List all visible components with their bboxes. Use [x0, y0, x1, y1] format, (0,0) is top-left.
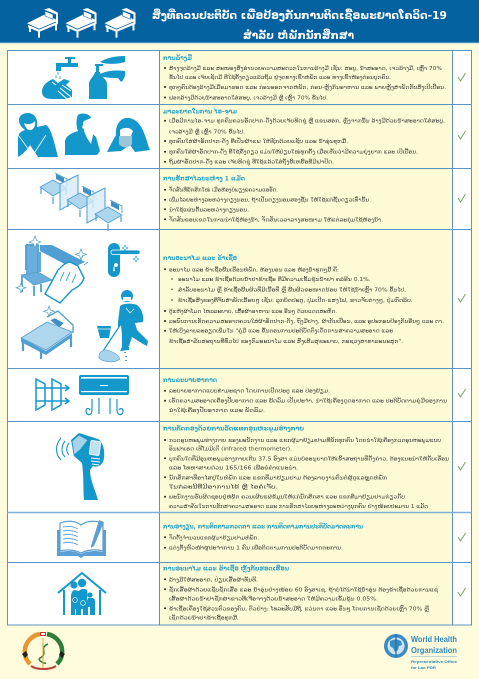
heading: ການຄັດກອງດ້ວຍການວັດແທກອຸນຫະພູມຮ່າງກາຍ	[163, 423, 304, 433]
text block: ລະບາຍອາກາດແບບທຳມະຊາດ ໂດຍການເປີດປະຕູ ແລະ ປ່ອງຢ້ຽມ.	[169, 387, 330, 395]
check mark	[458, 462, 466, 470]
logo: World Health Organization	[384, 634, 457, 670]
text block: ນຳໃຊ້ເຄື່ອງປັບອາກາດ ແລະ ພັດລົມ.	[169, 406, 265, 414]
text block: ກວດອຸນຫະພູມຮ່າງກາຍ ຂອງພະນັກງານ ແລະ ແຂກຜູ້ມາຢ້ຽມຢາມທີ່ພັກທຸກຄົນ ໂດຍນຳໃຊ້ເຄື່ອງກວດອຸນຫະພູມແບບ	[169, 437, 441, 444]
heading: ການອະນາໄມ ແລະ ຂ້າເຊື້ອ	[163, 253, 237, 262]
panel: one metre distancing	[40, 173, 466, 231]
text block: ຂຶ້ນໄປ ແລະ ເຈ້ຍເຊັດມື ທີ່ໃຊ້ຄັ້ງດຽວແລ້ວຖິ້ມ ຢູ່ຈຸດທາງເຂົ້າຫໍພັກ ແລະ ທາງເຂົ້າຫ້ອງຕ່ອນບຸກຄົນ.	[169, 73, 391, 81]
text block: ເມື່ອມີການໄອ-ຈາມ ທຸກຄົນຄວນອັດປາກ-ດັງດ້ວຍເຈ້ຍທິດຊູ່ ຫຼື ແຂນສອກ, ຫຼັງຈາກນັ້ນ ລ້າງມືດ້ວຍນ້ຳສະອາດໃສ່ສະບູ,	[169, 117, 445, 125]
check mark	[458, 73, 466, 81]
panel: cough etiquette	[18, 108, 466, 166]
text block: ໃນກໍລະນີທີ່ມີອາການໄຂ້ ຫຼື ໄອຄ່ໍເຈັບ.	[169, 483, 278, 491]
logo: Lao Ministry of Health	[22, 632, 65, 669]
text block: ລະນົບການເຮັດຄວາມສະອາດຄວນໃສ່ຜ້າອັດປາກ-ດັງ, ຖົງມືຢາງ, ຜ້າກັນເປື້ອນ, ແລະ ອຸປະກອນປ້ອງກັນອື່ນໆ ແລະ ຕາ.	[169, 317, 444, 325]
icon: cleaner mopping	[97, 290, 148, 362]
text block: ແລະ ໂທຫາສາຍດ່ວນ 165/166 ເພື່ອຂໍຄຳແນະນຳ.	[169, 464, 298, 471]
text block: ທຸກໆຄົນຕ້ອງລ້າງມືເມື່ອມາຮອດ ແລະ ກ່ອນອອກຈາກຫໍພັກ, ກ່ອນ-ຫຼັງກິນອາຫານ ແລະ ພາຍຫຼັງສຳພັດກັບສິ່ງເປິເປື້ອນ.	[169, 83, 446, 91]
header band	[0, 0, 479, 43]
text block	[164, 387, 448, 414]
panel: hand washing	[42, 53, 466, 102]
logo: World Health Organization: World Health	[411, 635, 457, 644]
icon: air flow vent	[36, 379, 69, 410]
text block	[164, 576, 438, 622]
text block: ອິນຟາເຣດ ເທີໂມມິເຕີ (infrared thermometer).	[168, 445, 292, 452]
check mark	[458, 194, 466, 202]
text block: ລ້າງມືໃຫ້ສະອາດ, ປ່ຽນເສື້ອຜ້າທັນທີ.	[169, 576, 258, 583]
check mark	[458, 131, 466, 139]
text block: ຈັດສັນທີ່ພັກສຶກໃໝ່ ເມື່ອຫ້ອງບໍ່ພຽງພໍຄວາມແອອັດ.	[168, 187, 278, 194]
text block: ຈັດສັນຂອບເຂດໃນການນຳໃຊ້ຫ້ອງນ້ຳ, ຈັດສັນເວລາລາງສະໜາມ ໃຫ້ແຕ່ລະກຸ່ມໃຊ້ຫ້ອງນ້ຳ.	[168, 216, 383, 223]
icon: family in a house	[58, 573, 106, 615]
heading: ການອາງຽນ, ການຕິດຕາມກວດກາ ແລະ ການຕິດຕາມການປະຕິບັດມາດຕະການ	[163, 522, 364, 531]
text block: ຊັກເສື້ອຜ້າດ້ວຍແຊັບຊັກເສື້ອ ແລະ ນ້ຳອຸ່ນຢ່າງໜ້ອຍ 60 ອົງສາເຊ, ຖ້າບໍ່ໄດ້ນຳໃຊ້ນ້ຳອຸ່ນ ຕ້ອງຂ້າເຊື້ອດ້ວຍການແຊ່	[169, 585, 438, 593]
panel: home cleaning and protection	[58, 564, 466, 622]
text block: ອະນາໄມ ແລະ ຂ້າເຊື້ອພື້ນເຮືອນຫໍພັກ, ຫ້ອງນອນ ແລະ ຫ້ອງນ້ຳທຸກໆມື້ ຄື:	[169, 265, 339, 273]
check mark	[458, 294, 466, 302]
text block: ນັກສຶກສາທີ່ອາໄສຢູ່ໃນຫໍພັກ ແລະ ແຂກທີ່ມາຢ້ຽມຢາມ ຕ້ອງລາຍງານຕົນຕໍ່ຜູ້ດູແລຫຼຸດຫໍພັກ	[168, 473, 388, 481]
heading: ການລ້າງມື	[163, 53, 193, 62]
text block	[164, 187, 383, 223]
icon: beds with partitions	[40, 173, 122, 231]
icon: open book and pen	[57, 520, 106, 558]
text block: ເຮັດຄວາມສະອາດເຄື່ອງປັບອາກາດ ແລະ ພັດລົມ ເປັນປະຈຳ, ນຳໃຊ້ເຄື່ອງດູດອາກາດ ແລະ ປະຕິບັດຕາມຄູ່ມືຂອງການ	[169, 397, 448, 405]
heading: ການລະບາຍອາກາດ	[163, 377, 217, 384]
check mark	[458, 588, 466, 596]
logo: World Health Organization: for Lao PDR	[411, 666, 436, 670]
icon: faucet and hand washing	[42, 56, 125, 99]
text block: ບຸກຄົນໃດທີ່ມີອຸນຫະພູມຮ່າງກາຍເກີນ 37.5 ອົງສາ ແມ່ນບໍ່ອະນຸຍາດໃຫ້ເຂົ້າສະຖານທີ່ດັ່ງກ່າວ, ຕ້ອງແນະນຳໃຫ້ກັບເຮືອນ	[169, 455, 450, 462]
check mark	[458, 533, 466, 541]
text block: ທຸກຄົນໃສ່ຜ້າອັດປາກ-ດັງ ທີ່ໃຊ້ຄັ້ງດຽວ ແມ່ນໃຫ້ປ່ຽນໃໝ່ທຸກຄັ້ງ ເມື່ອເຫັນວ່າມີຄວາມຍຸ່ງຍາກ ແລະ ເປິເປື້ອນ.	[169, 148, 418, 156]
text block: ເພີ່ມໄລຍະຫ່າງລະຫວ່າງຕຽງນອນ, ຖ້າເປັນຕຽງນອນສອງຊັ້ນ ໃຫ້ໃຊ້ແຕ່ຊັ້ນດຽວເທົ່ານັ້ນ.	[169, 196, 371, 204]
icon: table, chair and glove	[16, 236, 88, 303]
check mark	[458, 389, 466, 397]
text block: ສຳລັບອະນາໄມ ຫຼື ຂ້າເຊື້ອພື້ນຜິວທີ່ມີເນື້ອທີ່ ຫຼື ພື້ນຜິວຂະໜາດນ້ອຍ ໃຫ້ໃຊ້ນ້ຳເຫຼົ້າ 70% ຂຶ້ນໄປ.	[178, 285, 406, 293]
text block	[164, 117, 445, 166]
text block	[164, 265, 444, 345]
panel: ventilation	[36, 376, 466, 415]
heading: ການອະນາໄມ ແລະ ຂ້າເຊື້ອ ຫຼັງກັບຮອດເຮືອນ	[163, 564, 290, 573]
text block: ນຳໃຊ້ແຜ່ນກັ້ນລະຫວ່າງຕຽງນອນ.	[169, 206, 249, 213]
title: ສິ່ງທີ່ຄວນປະຕິບັດ ເພື່ອປ້ອງກັນການຕິດເຊື້ອພະຍາດໂຄວິດ-19	[152, 8, 447, 22]
icon: people covering coughs and wearing a mask	[18, 113, 150, 157]
text block: ຈັດຕັ້ງຈຳນວນແຂກຜູ້ມາຢ້ຽມຢາມຫໍພັກ.	[168, 534, 259, 541]
text block	[164, 65, 446, 102]
title	[152, 8, 447, 42]
text block: ຟອກລ້າງມືດ້ວຍນ້ຳສະອາດໃສ່ສະບູ, ເຈວລ້າງມື ຫຼື ເຫຼົ້າ 70% ຂຶ້ນໄປ.	[169, 94, 328, 102]
text block: ຂ້າເຊື້ອເຄື່ອງໃຊ້ສ່ວນຕົວຂອງຄົນ, ຕົວຢ່າງ: ໂທລະສັບມືຖື, ແວ່ນຕາ ແລະ ອື່ນໆ ໂດຍການເຊັດດ້ວຍເຫຼົ້າ 70% ຫຼື	[169, 605, 430, 612]
text block: ຂ້າເຊື້ອສຳລັບສະຖານທີ່ທົ່ວໄປ ຂອງກົມອະນາໄມ ແລະ ສົ່ງເສີມສຸຂະພາບ, ກະຊວງສາທາລະນະສຸກ".	[169, 337, 403, 345]
text block: ພະນັກງານຮັບຜິດຊອບຢູ່ຫໍພັກ ຄວນເຜີຍແຜ່ຂໍ້ມູນໃຫ້ແກ່ນັກສຶກສາ ແລະ ແຂກທີ່ມາຢ້ຽມຢາມກ່ຽວກັບ	[169, 494, 405, 501]
text block: ເສື້ອຜ້າດ້ວຍນ້ຳຢາຊັກຜ້າຂາວທີ່ເຈືອຈາງດ້ວຍນ້ຳສະອາດ ໃຫ້ມີຄວາມເຂັ້ມຂຸ້ນ 0.05%.	[169, 596, 378, 603]
logo: World Health Organization: Representative Office	[411, 660, 457, 664]
icon: door handle	[108, 243, 140, 277]
text block: ສ້າງຈຸດລ້າງມື ແລະ ສະໜອງສິ່ງອຳນວຍຄວາມສະດວກໃນການລ້າງມື ເຊັ່ນ: ສະບູ, ນ້ຳສະອາດ, ເຈວລ້າງມື, ເຫຼົ້າ 70%	[169, 65, 442, 72]
text block: ຂ້າເຊື້ອສິ່ງຂອງທີ່ຈັບສຳພັດເລື້ອຍໆ ເຊັ່ນ: ລູກບິດປະຕູ, ປຸ່ມເປີດ-ແສງໄຟ, ຮາວຈັບຕ່າງໆ, ປຸ່ມກົດລິບ.	[178, 296, 413, 304]
icon: three beds	[27, 8, 136, 38]
panel: registration and monitoring	[57, 520, 466, 558]
text block	[164, 534, 343, 552]
text block: ໃຫ້ເບິ່ງລາຍລະອຽດເພີ່ມໃນ "ຄູ່ມື ແລະ ຂັ້ນຕອນການປະຕິບັດຕົງເດັດການສຳຄວາມສະອາດ ແລະ	[169, 328, 394, 335]
panel: temperature screening	[56, 423, 466, 510]
icon: infrared thermometer	[56, 433, 104, 500]
logo: World Health Organization: Organization	[411, 646, 457, 655]
text block: ອະນາໄມ ແລະ ຂ້າເຊື້ອດ້ວຍນ້ຳຢາຂ້າເຊື້ອ ທີ່ມີຄວາມເຂັ້ມຂຸ້ນນ້ຳຢາ ຄລໍຣີນ 0.1%.	[178, 275, 371, 283]
text block: ເຈວລ້າງມື ຫຼື ເຫຼົ້າ 70% ຂຶ້ນໄປ.	[169, 128, 245, 136]
heading: ມາລະຍາດໃນການ ໄອ-ຈາມ	[163, 108, 237, 116]
heading: ການຮັກສາໄລຍະຫ່າງ 1 ແມັດ	[163, 174, 245, 183]
text block	[164, 437, 450, 510]
icon: air conditioner	[80, 376, 128, 415]
text block: ຕູ້ແຫ້ງຜ້າໂມດ ໄຫລລະຍາບ, ເສື້ອຜ້າອາຫານ ແລະ ອື່ນໆ ດ້ວຍແດດສະຫັດ.	[169, 307, 337, 315]
text block: ເຊັດດ້ວຍນ້ຳຢາຂ້າເຊື້ອທຸກມື້.	[169, 615, 239, 622]
title: ສຳລັບ ຫໍພັກນັກສຶກສາ	[243, 28, 354, 42]
text block: ຄວາມສຳຄັນໃນການຮັກສາຄວາມສະອາດ ແລະ ການຮັກສາໄລຍະຫ່າງລະຫວ່າງບຸກຄົນ ຢ່າງໜ້ອຍປະມານ 1 ແມັດ	[169, 502, 428, 510]
icon: bed being cleaned	[21, 306, 73, 359]
text block: ແຕ່ງຕັ້ງຫົວໜ້າຜູ້ປະຈຳການ 1 ຄົນ ເພື່ອຕິດຕາມການປະຕິບັດມາດຕະການ.	[169, 545, 343, 552]
panel: cleaning and disinfection	[16, 236, 465, 362]
text block: ທຸກຄົນໃສ່ຜ້າອັດປາກ-ດັງ ທີ່ເປັນຜ້າແພ ໃຫ້ຊັກດ້ວຍແຊັບ ແລະ ນ້ຳອຸ່ນທຸກມື້.	[169, 137, 348, 145]
text block: ຖິ້ມຜ້າອັດປາກ-ດັງ ແລະ ເຈ້ຍທິດຊູ່ ທີ່ໃຊ້ແລ້ວໃສ່ຖັງຂີ້ເຫຍື້ອທີ່ມີຝາປິດ.	[168, 158, 334, 166]
